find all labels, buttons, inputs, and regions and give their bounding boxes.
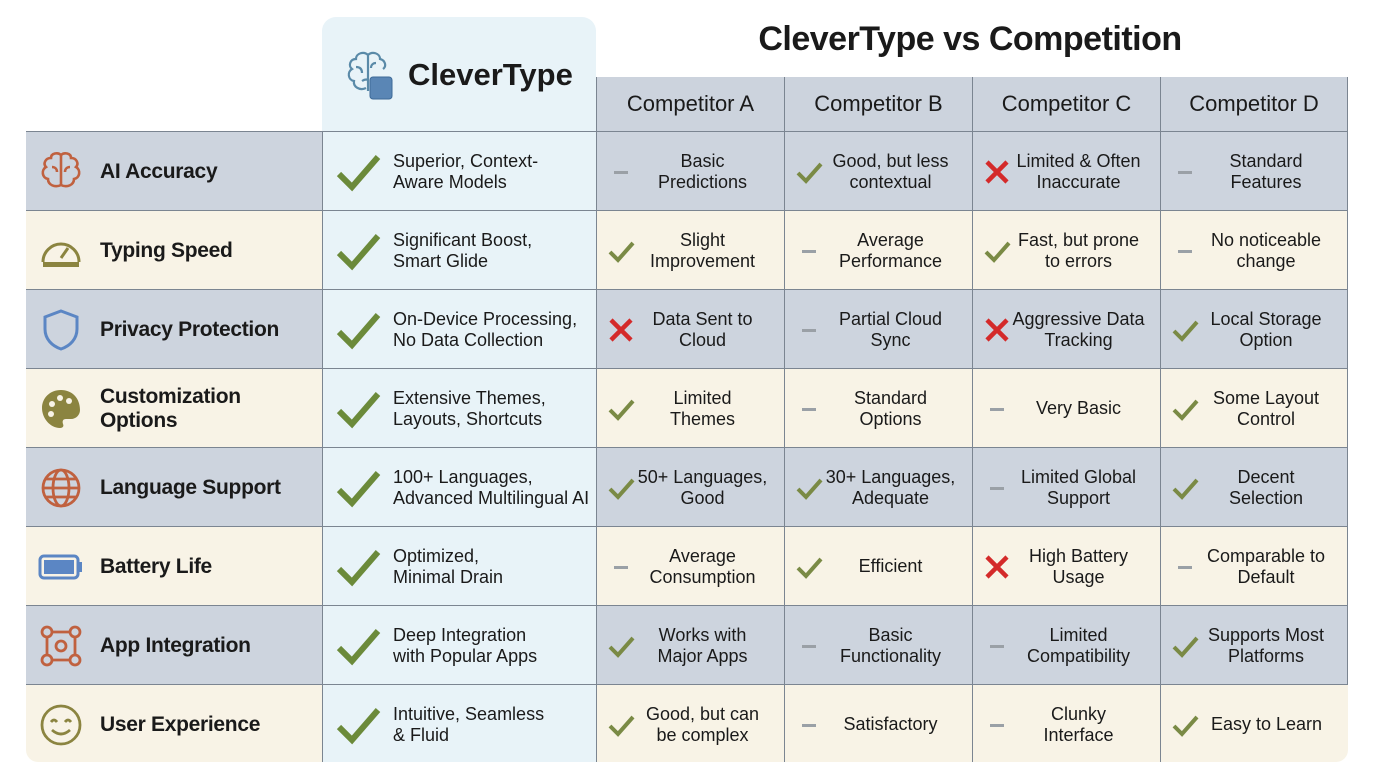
row: Privacy Protection: Partial Cloud [839, 308, 942, 328]
row: AI Accuracy: Inaccurate [1036, 172, 1121, 192]
row: Privacy Protection: Aggressive Data [1012, 308, 1145, 328]
row: User Experience: User Experience [100, 712, 260, 736]
row: Customization Options: Extensive Themes, [393, 388, 546, 408]
row: Customization Options: Customization [100, 384, 241, 408]
row: App Integration: App Integration [100, 634, 251, 656]
row: Typing Speed: Average [857, 230, 924, 250]
title: CleverType vs Competition [758, 20, 1182, 58]
row: Typing Speed: Performance [839, 250, 942, 270]
header: competitors: Competitor D [1189, 91, 1319, 116]
row: AI Accuracy: Features [1230, 172, 1302, 192]
row: App Integration: Deep Integration [393, 624, 526, 644]
row: Language Support: Advanced Multilingual AI [393, 488, 589, 508]
row: AI Accuracy [26, 131, 1348, 210]
row: AI Accuracy: AI Accuracy [100, 160, 217, 182]
row: Language Support [26, 447, 1348, 526]
row: App Integration: with Popular Apps [393, 646, 537, 666]
row: Customization Options: Some Layout [1213, 388, 1319, 408]
row: Language Support: Limited Global [1021, 466, 1136, 486]
row: Battery Life: Consumption [649, 566, 756, 586]
row: App Integration: Major Apps [657, 646, 748, 666]
row: User Experience: Easy to Learn [1211, 714, 1322, 734]
row: App Integration: Compatibility [1027, 646, 1130, 666]
row: AI Accuracy: Standard [1229, 150, 1303, 170]
row: User Experience: & Fluid [393, 724, 449, 744]
row: Language Support: Adequate [852, 488, 929, 508]
row: Customization Options: Layouts, Shortcuts [393, 408, 542, 428]
row: Typing Speed: Fast, but prone [1018, 230, 1139, 250]
row: Customization Options: Options [100, 408, 177, 432]
row: App Integration: Limited [1049, 624, 1108, 644]
row: Typing Speed: Typing Speed [100, 238, 233, 262]
row: Battery Life: Efficient [859, 556, 922, 576]
row: Battery Life: Battery Life [100, 554, 212, 578]
row: AI Accuracy: Good, but less [832, 150, 949, 170]
row: Language Support: Good [680, 488, 725, 508]
header: competitors: Competitor B [814, 91, 943, 116]
row: Battery Life: Average [669, 546, 736, 566]
row: Customization Options: Very Basic [1036, 398, 1121, 418]
row: Typing Speed: Slight [680, 230, 725, 250]
row: User Experience: be complex [656, 724, 749, 744]
row: Battery Life: Usage [1052, 566, 1105, 586]
panel: CleverType header [322, 17, 596, 132]
row: App Integration: Functionality [840, 646, 941, 666]
row: Typing Speed: Significant Boost, [393, 230, 532, 250]
row: Customization Options [26, 368, 1348, 447]
row: AI Accuracy: Aware Models [393, 172, 507, 192]
row: Customization Options: Limited [673, 388, 732, 408]
row: App Integration [26, 605, 1348, 684]
row: Customization Options: Control [1237, 408, 1295, 428]
row: Language Support: 30+ Languages, [826, 466, 955, 486]
row: Privacy Protection: Local Storage [1210, 308, 1322, 328]
row: AI Accuracy: Predictions [658, 172, 747, 192]
row: User Experience: Intuitive, Seamless [393, 704, 544, 724]
row: User Experience: Interface [1043, 724, 1114, 744]
row: App Integration: Platforms [1228, 646, 1304, 666]
row: Typing Speed: change [1236, 250, 1296, 270]
row: User Experience: Good, but can [646, 704, 759, 724]
row: Language Support: Selection [1229, 488, 1303, 508]
header: competitors: Competitor C [1002, 91, 1131, 116]
row: Customization Options: Options [859, 408, 922, 428]
row: Battery Life: High Battery [1029, 546, 1128, 566]
row: AI Accuracy: Superior, Context- [393, 150, 538, 170]
row: Customization Options: Standard [854, 388, 927, 408]
row: Typing Speed: No noticeable [1211, 230, 1321, 250]
row: Typing Speed: to errors [1045, 250, 1112, 270]
row: Privacy Protection: Sync [870, 330, 911, 350]
row: User Experience: Satisfactory [843, 714, 938, 734]
row: Privacy Protection [26, 289, 1348, 368]
panel: CleverType header: CleverType [408, 56, 573, 92]
row: Privacy Protection: Tracking [1044, 330, 1113, 350]
row: Privacy Protection: Option [1239, 330, 1293, 350]
row: Battery Life [26, 526, 1348, 605]
row: User Experience: Clunky [1051, 704, 1106, 724]
row: Privacy Protection: No Data Collection [393, 330, 543, 350]
row: App Integration: Works with [659, 624, 746, 644]
row: Language Support: Decent [1237, 466, 1295, 486]
row: App Integration: Supports Most [1208, 624, 1324, 644]
row: AI Accuracy: Basic [680, 150, 724, 170]
row: Privacy Protection: Privacy Protection [100, 318, 279, 340]
row: AI Accuracy: contextual [849, 172, 932, 192]
row: Typing Speed [26, 210, 1348, 289]
row: Language Support: 50+ Languages, [638, 466, 767, 486]
header: competitors: Competitor A [627, 91, 754, 116]
row: Battery Life: Comparable to [1207, 546, 1325, 566]
row: User Experience [26, 684, 1348, 762]
row: AI Accuracy: Limited & Often [1016, 150, 1141, 170]
row: Language Support: Support [1047, 488, 1110, 508]
icon: brain keyboard [348, 52, 392, 100]
row: Language Support: 100+ Languages, [393, 466, 533, 486]
row: Privacy Protection: Data Sent to [652, 308, 753, 328]
row: App Integration: Basic [868, 624, 912, 644]
row: Battery Life: Default [1237, 566, 1295, 586]
header: competitors [596, 77, 1348, 131]
row: Customization Options: Themes [670, 408, 735, 428]
row: Privacy Protection: Cloud [679, 330, 726, 350]
row: Typing Speed: Improvement [650, 250, 755, 270]
row: Battery Life: Minimal Drain [393, 566, 503, 586]
row: Language Support: Language Support [100, 476, 281, 498]
row: Battery Life: Optimized, [393, 546, 479, 566]
row: Privacy Protection: On-Device Processing, [393, 308, 577, 328]
row: Typing Speed: Smart Glide [393, 250, 488, 270]
